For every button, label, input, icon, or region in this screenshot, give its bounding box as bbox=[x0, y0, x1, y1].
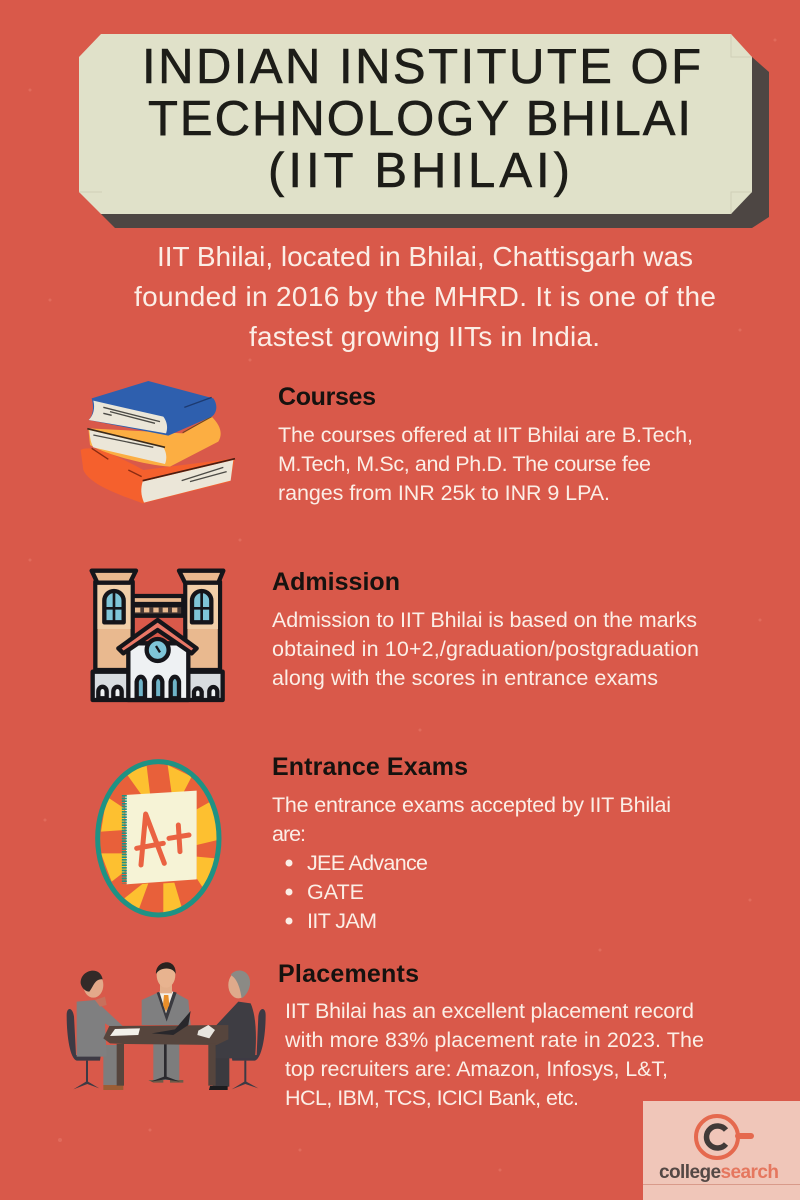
section: placements: HCL, IBM, TCS, ICICI Bank, etc. bbox=[285, 1086, 579, 1110]
section: entrance exams: Entrance Exams bbox=[272, 753, 468, 781]
section: admission bbox=[272, 568, 699, 690]
section: placements: Placements bbox=[278, 960, 419, 988]
section: entrance exams: JEE Advance bbox=[307, 851, 428, 875]
section: entrance exams: are: bbox=[272, 822, 306, 846]
section: courses: The courses offered at IIT Bhilai are B.Tech, bbox=[278, 423, 693, 447]
icon: institute building bbox=[92, 571, 223, 700]
title banner: INDIAN INSTITUTE OF bbox=[142, 40, 701, 94]
section: placements: top recruiters are: Amazon, Infosys, L&T, bbox=[285, 1057, 668, 1081]
section: courses: ranges from INR 25k to INR 9 LPA. bbox=[278, 481, 610, 505]
section: placements: with more 83% placement rate in 2023. The bbox=[284, 1028, 704, 1052]
section: admission: along with the scores in entrance exams bbox=[272, 666, 658, 690]
icon: stack of books bbox=[81, 381, 235, 503]
intro text bbox=[134, 241, 716, 352]
title banner: TECHNOLOGY BHILAI bbox=[148, 92, 691, 146]
title banner bbox=[79, 34, 769, 228]
section: entrance exams: IIT JAM bbox=[307, 909, 377, 933]
icon: people at a meeting table bbox=[67, 962, 266, 1090]
section: entrance exams: GATE bbox=[307, 880, 364, 904]
icon: A+ notebook badge bbox=[98, 762, 219, 915]
section: admission: Admission bbox=[272, 568, 400, 596]
section: courses bbox=[278, 383, 693, 505]
logo: collegesearch: collegesearch bbox=[659, 1162, 779, 1183]
section: entrance exams: The entrance exams accepted by IIT Bhilai bbox=[272, 793, 671, 817]
section: courses: Courses bbox=[278, 383, 376, 411]
section: placements bbox=[278, 960, 704, 1110]
intro text: fastest growing IITs in India. bbox=[249, 321, 600, 352]
intro text: founded in 2016 by the MHRD. It is one of the bbox=[134, 281, 716, 312]
section: admission: Admission to IIT Bhilai is based on the marks bbox=[272, 608, 697, 632]
section: courses: M.Tech, M.Sc, and Ph.D. The course fee bbox=[278, 452, 651, 476]
section: entrance exams bbox=[272, 753, 671, 933]
logo: collegesearch bbox=[643, 1101, 800, 1200]
section: placements: IIT Bhilai has an excellent placement record bbox=[285, 999, 694, 1023]
section: admission: obtained in 10+2,/graduation/postgraduation bbox=[272, 637, 699, 661]
intro text: IIT Bhilai, located in Bhilai, Chattisgarh was bbox=[157, 241, 693, 272]
title banner: (IIT BHILAI) bbox=[268, 144, 570, 198]
